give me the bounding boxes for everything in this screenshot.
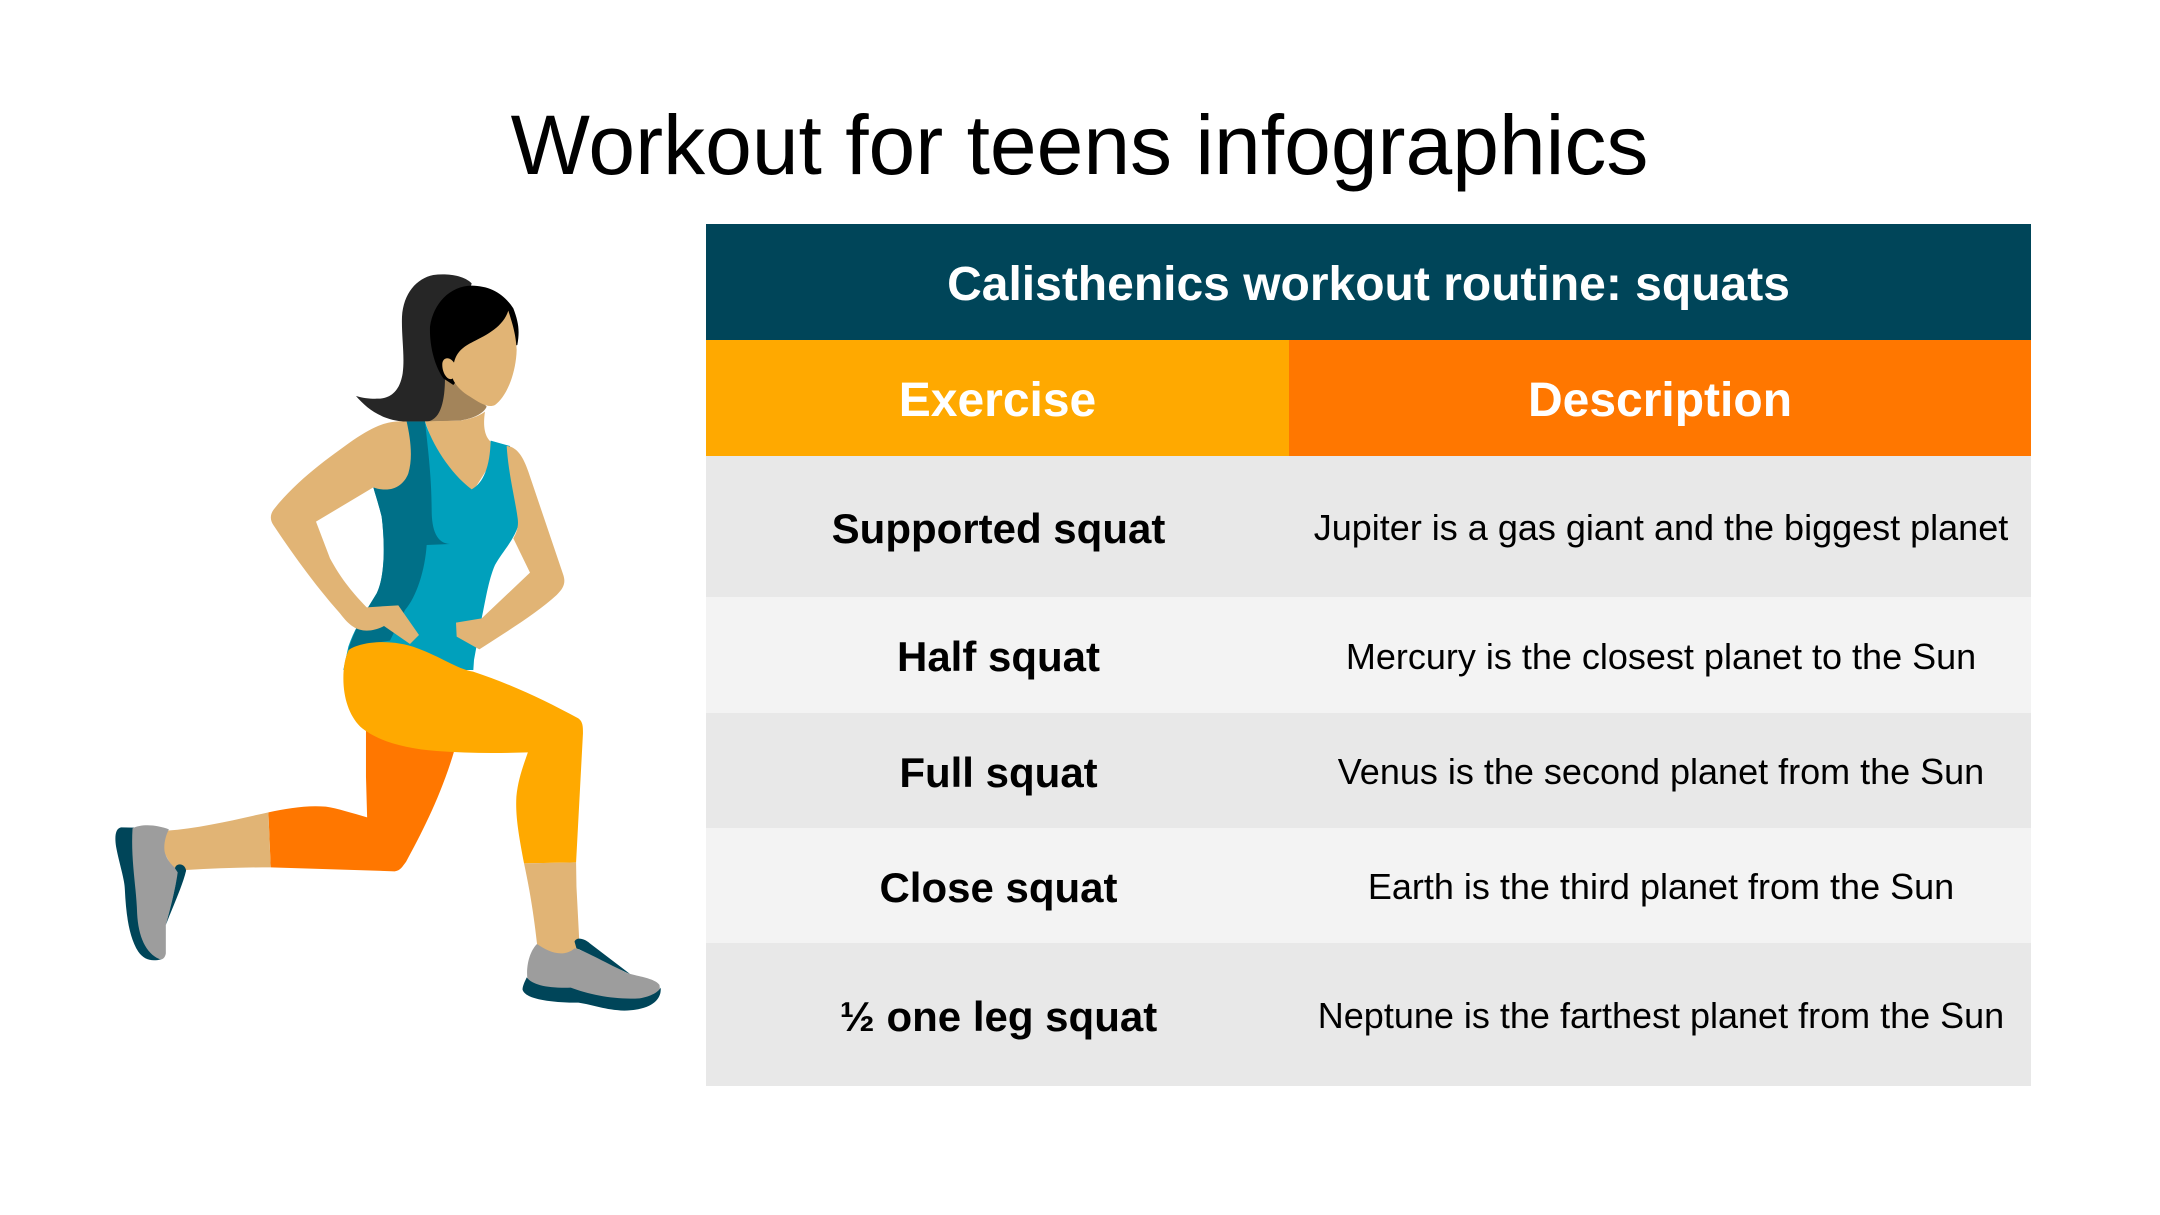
column header: description: [1289, 340, 2031, 456]
chest skin: [425, 412, 491, 493]
row: full squat: [706, 713, 2031, 828]
description: Earth is the third planet from the Sun: [1368, 866, 1954, 907]
lower body: [115, 642, 661, 1011]
back shoe sole: [115, 827, 165, 960]
neck shadow: [427, 377, 487, 422]
face: [442, 311, 517, 406]
front calf: [524, 862, 579, 960]
front shoe tongue: [575, 939, 630, 974]
exercise name: ½ one leg squat: [840, 992, 1157, 1040]
column header: description: Description: [1528, 374, 1792, 426]
front shoe sole: [523, 977, 661, 1011]
table: [706, 224, 2031, 1086]
tank top shadow: [348, 422, 450, 650]
table title bar: Calisthenics workout routine: squats: [947, 258, 1790, 310]
upper body: [271, 274, 564, 670]
front hair: [430, 286, 519, 385]
exercise name: Half squat: [897, 633, 1100, 680]
description: Venus is the second planet from the Sun: [1338, 751, 1984, 792]
description: Neptune is the farthest planet from the Sun: [1318, 995, 2004, 1036]
back hair: [356, 274, 472, 422]
description: Mercury is the closest planet to the Sun: [1346, 636, 1976, 676]
back shoe: [132, 825, 178, 959]
column header: exercise: [706, 340, 1289, 456]
exercise name: Supported squat: [832, 504, 1165, 552]
tank top: [343, 422, 520, 670]
back shoe lace: [166, 864, 186, 925]
table title bar: [706, 224, 2031, 340]
row: supported squat: [706, 456, 2031, 597]
row: half squat: [706, 597, 2031, 713]
column header: exercise: Exercise: [899, 374, 1096, 426]
front shoe: [527, 944, 660, 1003]
front leg legging: [343, 642, 583, 863]
row: half one leg squat: [706, 943, 2031, 1086]
right arm: [456, 446, 564, 649]
back leg legging: [268, 730, 454, 871]
back calf: [161, 812, 271, 870]
exercise name: Full squat: [899, 748, 1098, 796]
row: close squat: [706, 828, 2031, 943]
exercise name: Close squat: [879, 864, 1118, 910]
description: Jupiter is a gas giant and the biggest planet: [1314, 507, 2008, 548]
left arm: [271, 421, 419, 644]
title: Workout for teens infographics: [511, 98, 1648, 192]
